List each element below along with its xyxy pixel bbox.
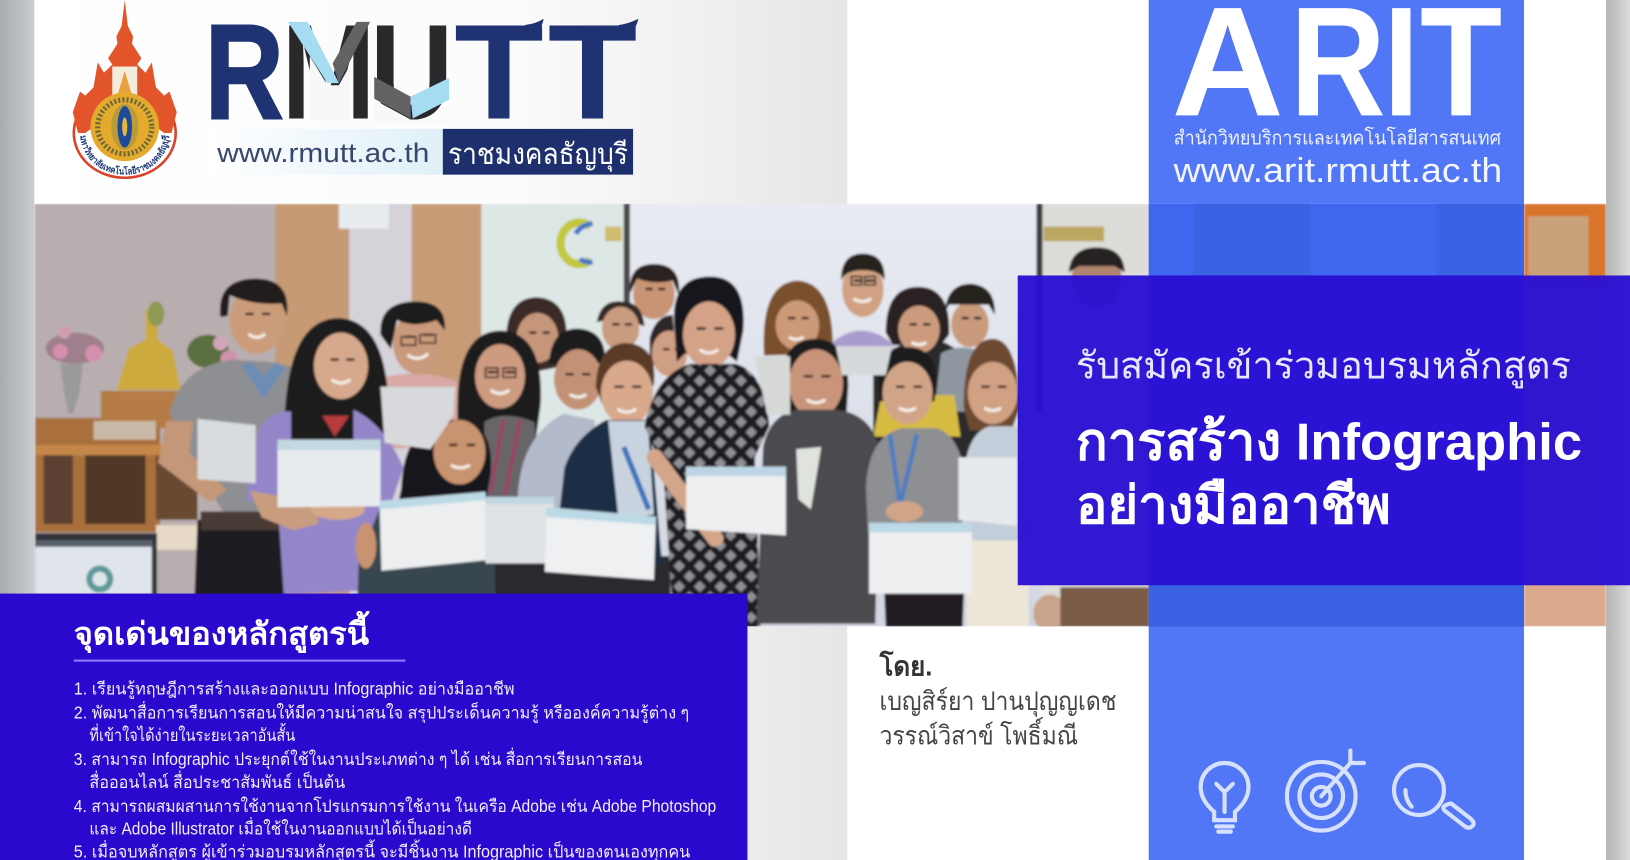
- icon: target with arrow: [1287, 751, 1364, 831]
- logo: RMUTT wordmark: U: [370, 0, 453, 148]
- photo: group of course participants holding certificates: [34, 204, 1606, 632]
- logo: RMUTT wordmark: T: [548, 0, 637, 148]
- woman striped: [549, 328, 605, 364]
- list of highlights: สื่อออนไลน์ สื่อประชาสัมพันธ์ เป็นต้น: [89, 770, 345, 792]
- woman purple: [284, 316, 388, 441]
- list of highlights: [74, 678, 716, 860]
- text: ARIT department name: สำนักวิทยบริการและเทคโนโลยีสารสนเทศ: [1174, 126, 1502, 149]
- icon: light bulb: [1201, 763, 1248, 832]
- panel: course highlights: [0, 594, 747, 860]
- woman glasses: [457, 331, 541, 449]
- list of highlights: 2. พัฒนาสื่อการเรียนการสอนให้มีความน่าสนใจ สรุปประเด็นความรู้ หรือองค์ความรู้ต่าง ๆ: [74, 700, 689, 723]
- logo: RMUTT wordmark: T: [454, 0, 544, 148]
- text block: authors: เบญสิร์ยา ปานปุญญเดช: [879, 686, 1116, 717]
- text block: authors: โดย.: [878, 650, 932, 682]
- woman front centre: [398, 418, 492, 500]
- logo: RMUTT emblem: [72, 0, 177, 179]
- list of highlights: 3. สามารถ Infographic ประยุกต์ใช้ในงานประเภทต่าง ๆ ได้ เช่น สื่อการเรียนการสอน: [74, 747, 643, 770]
- text: ARIT website: www.arit.rmutt.ac.th: [1173, 152, 1502, 190]
- emblem ring text: มหาวิทยาลัยเทคโนโลยีราชมงคลธัญบุรี: [80, 135, 172, 175]
- glasses: [401, 277, 875, 377]
- woman navy jacket: [596, 343, 654, 403]
- heading: course title: [1076, 413, 1582, 535]
- dark clothing base behind front row: [492, 554, 673, 594]
- logo: RMUTT wordmark: [205, 0, 638, 148]
- logo: website strip: www.rmutt.ac.th: [216, 138, 429, 168]
- man behind band: [1070, 264, 1123, 276]
- man grey shirt: [168, 358, 293, 513]
- icon: magnifying glass: [1394, 765, 1474, 828]
- list of highlights: และ Adobe Illustrator เมื่อใช้ในงานออกแบบได้เป็นอย่างดี: [89, 817, 472, 839]
- heading: course title: การสร้าง Infographic: [1076, 413, 1582, 471]
- list of highlights: 4. สามารถผสมผสานการใช้งานจากโปรแกรมการใช้งาน ในเครือ Adobe เช่น Adobe Photoshop: [74, 796, 716, 816]
- text block: authors: วรรณ์วิสาข์ โพธิ์มณี: [879, 716, 1078, 750]
- heading underline: [74, 660, 405, 662]
- logo: website strip: [208, 129, 633, 175]
- heading: course title: อย่างมืออาชีพ: [1076, 477, 1391, 535]
- people back row: [871, 340, 982, 459]
- woman grey blazer: [786, 338, 850, 414]
- logo: ARIT wordmark: [1172, 0, 1502, 149]
- hands and arms: [311, 506, 366, 521]
- man with glasses pink shirt: [376, 374, 459, 450]
- logo: website strip: ราชมงคลธัญบุรี: [448, 139, 628, 172]
- desk and laptop: [156, 525, 208, 550]
- central woman dotted dress: [674, 277, 744, 362]
- certificates: [198, 419, 256, 483]
- heading: course highlights: จุดเด่นของหลักสูตรนี้: [74, 611, 370, 654]
- subtitle: course enrolment: รับสมัครเข้าร่วมอบรมหลักสูตร: [1076, 344, 1571, 388]
- list of highlights: 1. เรียนรู้ทฤษฎีการสร้างและออกแบบ Infographic อย่างมืออาชีพ: [74, 678, 515, 699]
- right woman: [964, 339, 1020, 430]
- logo: RMUTT wordmark: R: [205, 0, 284, 148]
- logo: RMUTT wordmark: M: [282, 0, 375, 148]
- text block: authors: [878, 650, 1116, 750]
- panel: blue ARIT column: [1149, 0, 1524, 860]
- list of highlights: ที่เข้าใจได้ง่ายในระยะเวลาอันสั้น: [89, 723, 295, 745]
- shrine furniture: [35, 418, 160, 532]
- woman grey shirt yellow scarf: [878, 347, 937, 401]
- logo on wall: [561, 222, 590, 264]
- facial features: [246, 281, 1005, 445]
- panel: course title band: [1018, 275, 1630, 585]
